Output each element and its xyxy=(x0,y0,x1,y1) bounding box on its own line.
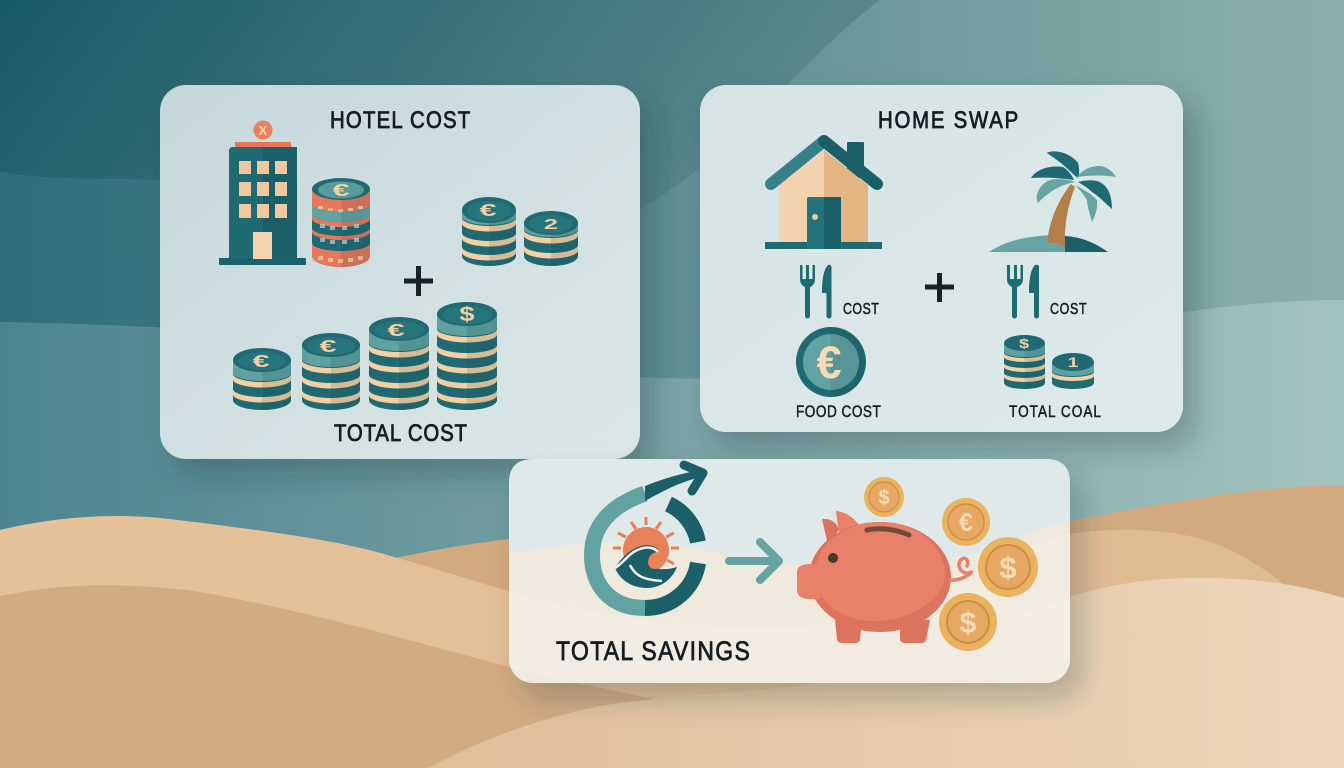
sky tint inside savings panel xyxy=(509,459,1070,564)
label: total coal: TOTAL COAL xyxy=(1009,403,1101,421)
icon: gold coin 3 xyxy=(978,537,1038,597)
icon: coin stack with dollar xyxy=(1004,335,1045,389)
icon: gold coin 4: $ xyxy=(960,607,977,640)
icon: coin stack numbered 2 xyxy=(524,211,578,266)
label: cost right: COST xyxy=(1050,301,1087,318)
icon: gold coin 2: € xyxy=(959,509,973,537)
stack 4 xyxy=(437,302,497,410)
stack 3: € xyxy=(387,322,405,340)
panel: total savings xyxy=(509,459,1070,683)
icon: house xyxy=(765,141,882,249)
icon: piggy bank xyxy=(797,511,972,643)
heading: home swap: HOME SWAP xyxy=(878,106,1018,133)
icon: coin stack with dollar: $ xyxy=(1019,338,1029,351)
heading: hotel cost: HOTEL COST xyxy=(330,106,471,133)
icon: gold coin 4 xyxy=(939,593,997,651)
label: food cost: FOOD COST xyxy=(796,403,881,421)
icon: euro coin: € xyxy=(816,337,842,388)
stack 1 xyxy=(233,348,291,410)
icon: euro coin stack: € xyxy=(479,202,497,220)
icon: gold coin 1 xyxy=(864,477,904,517)
icon: euro coin xyxy=(796,327,866,397)
icon: wave xyxy=(615,545,677,588)
stack 4: $ xyxy=(459,303,475,326)
panel: hotel cost xyxy=(160,85,640,459)
icon: coin stack numbered 1: 1 xyxy=(1068,355,1078,370)
icon: gold coin 1: $ xyxy=(878,487,890,509)
arrow xyxy=(729,542,779,580)
icon: gold coin 2 xyxy=(942,498,990,546)
icon: palm tree island xyxy=(989,151,1116,252)
plus sign xyxy=(404,266,433,296)
stack 2 xyxy=(302,333,360,410)
chart: growing coin stacks xyxy=(233,302,497,410)
icon: fork and knife left xyxy=(800,265,832,318)
icon: euro coin stack xyxy=(462,197,516,266)
icon: gold coin 3: $ xyxy=(999,550,1017,585)
icon: red patterned coin stack: € xyxy=(332,182,350,200)
label: total savings: TOTAL SAVINGS xyxy=(556,636,750,666)
label: cost left: COST xyxy=(843,301,879,318)
icon: circular arrow with sun and wave xyxy=(592,465,703,608)
icon: fork and knife right xyxy=(1007,265,1039,318)
panel: home swap xyxy=(700,85,1183,432)
stack 1: € xyxy=(252,353,270,371)
icon: coin stack numbered 1 xyxy=(1052,353,1094,389)
icon: hotel building xyxy=(219,120,306,265)
icon: hotel building: X xyxy=(259,123,268,138)
stack 3 xyxy=(369,317,429,410)
icon: sun xyxy=(613,517,679,573)
icon: red patterned coin stack xyxy=(312,178,370,267)
icon: coin stack numbered 2: 2 xyxy=(544,216,558,232)
label: total cost: TOTAL COST xyxy=(334,419,467,446)
plus sign xyxy=(925,273,954,302)
stack 2: € xyxy=(319,338,337,356)
